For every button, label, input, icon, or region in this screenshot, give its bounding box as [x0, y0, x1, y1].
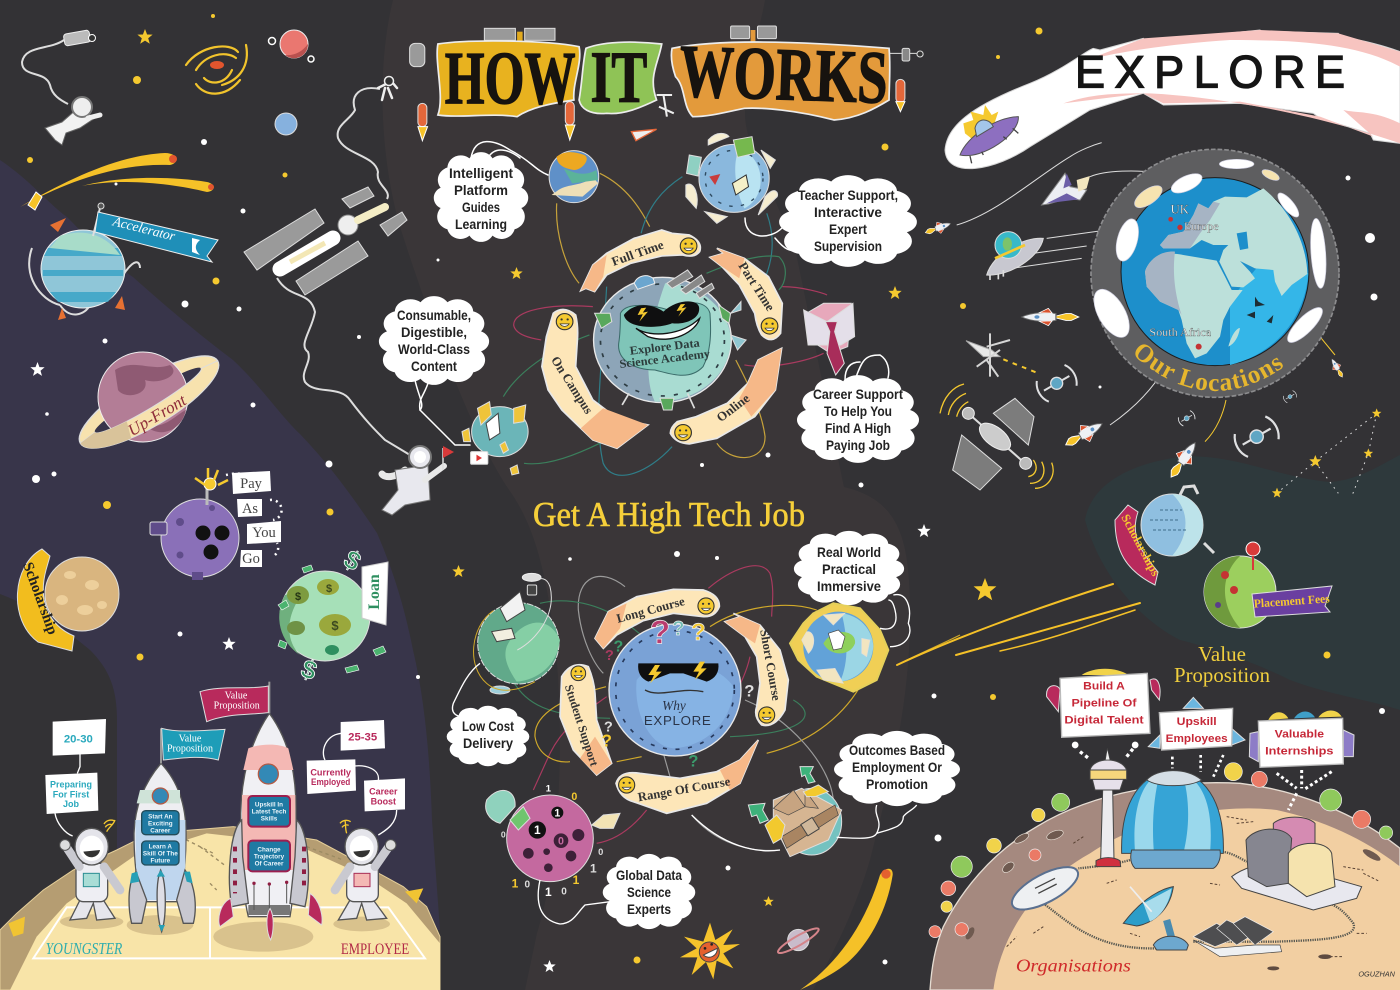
ribbon: Range Of Course — [616, 740, 758, 813]
cloud: Low Cost Delivery — [447, 706, 529, 766]
cloud: Low Cost Delivery: Delivery — [463, 735, 513, 751]
connectors and labels: age boxes: Currently — [310, 767, 351, 777]
flag: value proposition crimson: Value — [225, 690, 248, 701]
comet: Explore: EXPLORE — [1075, 47, 1345, 98]
heading: Value Proposition: Proposition — [1174, 663, 1270, 687]
cloud: Outcomes Based: Promotion — [866, 776, 928, 792]
Pay As You Go labels: Pay — [240, 476, 263, 492]
title: How It Works: IT — [590, 38, 647, 118]
rocket: employee: Latest Tech — [252, 809, 286, 816]
cloud: Teacher Support: Supervision — [814, 238, 882, 254]
planet: Loan: $ — [339, 544, 367, 577]
icon: small astronaut and satellite with tether — [22, 30, 100, 145]
Pay As You Go labels: As — [242, 501, 258, 517]
binary digits — [501, 784, 603, 899]
cloud: Low Cost Delivery: Low Cost — [462, 718, 514, 734]
title: satellites and rockets — [410, 26, 923, 141]
icon: constellation — [1272, 408, 1381, 498]
label: Organisations: Organisations — [1016, 956, 1131, 976]
rocket: youngster: Future — [150, 858, 171, 865]
ribbon: Short Course: Short Course — [757, 628, 784, 702]
rocket: employee: Change — [257, 846, 281, 853]
cloud: Outcomes Based: Outcomes Based — [849, 742, 945, 758]
icon: tie fighters — [1033, 363, 1298, 459]
title: How It Works: WORKS — [678, 30, 889, 120]
cloud: Outcomes Based: Employment Or — [852, 759, 942, 775]
cloud: Consumable Content: Consumable, — [397, 307, 471, 323]
heading: Value Proposition: Value — [1198, 642, 1246, 666]
signature: OGUZHAN — [1358, 970, 1396, 979]
binary digits: 1 — [512, 876, 519, 890]
rocket: youngster: Career — [150, 827, 171, 834]
ribbon: Part Time — [710, 248, 782, 340]
binary digits: 1 — [590, 862, 597, 876]
cloud: Intelligent Platform Guides Learning: Learning — [455, 216, 507, 232]
ribbon: On Campus: On Campus — [548, 354, 596, 416]
connectors and labels: age boxes: Job — [63, 799, 79, 809]
planet: low cost delivery — [452, 573, 560, 717]
flag: value proposition teal: Value — [179, 734, 202, 745]
icon: red planet — [268, 30, 314, 62]
question marks: ? — [672, 618, 684, 640]
planet: Loan: $ — [326, 583, 332, 595]
icon: shuttle — [1042, 173, 1090, 205]
connector lines: top clouds — [415, 142, 889, 445]
flag: value proposition teal: Proposition — [167, 744, 213, 755]
question marks: ? — [604, 720, 613, 736]
cloud: Teacher Support — [779, 175, 917, 267]
globe: our locations: South Africa — [1149, 325, 1212, 339]
binary digits: 1 — [546, 784, 551, 794]
rocket: youngster — [129, 763, 195, 932]
rocket: employee: Of Career — [255, 860, 284, 867]
planet: Scholarship: Scholarship — [19, 560, 60, 637]
planet: data experts — [486, 784, 620, 924]
cloud: Intelligent Platform Guides Learning: Platform — [454, 182, 508, 198]
icon: blue planet — [275, 113, 297, 135]
sign: Build A Pipeline: Build A — [1083, 680, 1125, 692]
icon: satellite with signals — [940, 384, 1053, 490]
orbits — [513, 566, 960, 850]
comets top left — [20, 153, 214, 207]
planet: Loan — [278, 544, 388, 686]
cloud: Real World Practical Immersive: Real World — [817, 544, 881, 560]
planet: Pay As You Go — [150, 468, 282, 580]
cloud: Global Data Science Experts: Science — [627, 884, 671, 900]
ribbon: Online — [670, 348, 782, 444]
central planet: Why Explore: EXPLORE — [644, 713, 711, 728]
cloud: Intelligent Platform Guides Learning — [434, 152, 528, 242]
cloud: Consumable Content: World-Class — [398, 341, 470, 357]
comet bottom — [800, 869, 893, 990]
heading: Value Proposition — [1174, 642, 1270, 687]
planet: Scholarships — [1115, 486, 1214, 585]
ribbon: On Campus — [542, 310, 648, 448]
ribbon: Online: Online — [714, 391, 753, 425]
sign: Build A Pipeline — [1047, 669, 1160, 759]
central planet: Explore Data Science Academy: Science Academy — [619, 347, 711, 371]
icon: flying saucer and sun — [960, 105, 1018, 163]
connectors and labels: age boxes: Preparing — [50, 779, 92, 789]
rocket: youngster: Exciting — [148, 820, 173, 827]
cloud: Career Support: Find A High — [825, 420, 891, 436]
cloud: Global Data Science Experts: Global Data — [616, 867, 682, 883]
planet: Placement Fees — [1204, 542, 1332, 628]
sign: Valuable Internships: Internships — [1265, 745, 1333, 757]
binary digits: 1 — [545, 885, 552, 899]
rocket: youngster: Learn A — [149, 844, 172, 851]
flag: value proposition crimson — [200, 682, 269, 722]
connectors and labels: age boxes — [45, 719, 405, 836]
question marks — [601, 614, 754, 771]
ribbon: Full Time — [581, 230, 700, 292]
ribbon: Long Course: Long Course — [615, 594, 687, 626]
diagram: Explore Data Science Academy — [462, 133, 855, 475]
connectors and labels: age boxes: For First — [53, 789, 89, 799]
section: Explore comet and locations — [924, 30, 1400, 538]
globe: our locations: Our Locations — [1135, 344, 1283, 392]
tethers — [957, 143, 1335, 442]
planet: Loan: Loan — [366, 574, 383, 610]
globe clouds — [1087, 159, 1328, 347]
ribbon: Range Of Course: Range Of Course — [637, 774, 732, 804]
globe: our locations: UK — [1171, 202, 1190, 216]
flag: value proposition crimson: Proposition — [214, 700, 260, 711]
sign: Build A Pipeline: Digital Talent — [1064, 715, 1144, 727]
sign: Valuable Internships — [1249, 710, 1354, 810]
cloud: Intelligent Platform Guides Learning: Intelligent — [449, 165, 513, 181]
cloud: Real World Practical Immersive: Practical — [822, 561, 876, 577]
planet: Loan: $ — [331, 618, 339, 633]
cloud: Teacher Support: Expert — [829, 221, 867, 237]
icon: smiling sun — [680, 923, 740, 979]
cloud: Consumable Content — [379, 296, 489, 385]
sign: Upskill Employees: Employees — [1166, 733, 1228, 745]
ribbon: Full Time: Full Time — [610, 238, 666, 269]
title: How It Works: HOW — [445, 37, 576, 120]
question marks: ? — [613, 639, 623, 656]
connectors and labels: age boxes: 20-30 — [64, 734, 93, 746]
ribbon: Short Course — [725, 613, 788, 726]
section: Youngster and Employee moon — [0, 682, 440, 990]
icon: small ringed planet — [776, 925, 821, 956]
icon: galaxy — [186, 45, 247, 94]
planet: Up-Front: Up-Front — [124, 390, 191, 440]
connectors and labels: age boxes: Career — [369, 786, 398, 796]
long comet trails centre right — [897, 584, 1140, 665]
icon: drone — [966, 333, 1040, 377]
cables — [1043, 852, 1354, 948]
binary digits: 0 — [571, 791, 577, 803]
ribbon: Long Course — [595, 589, 719, 648]
label: Employee: EMPLOYEE — [341, 941, 409, 958]
connectors and labels: age boxes: Employed — [311, 777, 350, 787]
planet: Loan: $ — [295, 591, 301, 603]
binary digits: 0 — [598, 847, 603, 857]
flag: value proposition teal — [161, 728, 225, 763]
planet: intelligent platform — [549, 151, 599, 203]
globe: our locations — [1090, 148, 1340, 398]
question marks: ? — [601, 731, 612, 751]
cloud: Career Support: To Help You — [824, 403, 892, 419]
Pay As You Go labels: Go — [242, 551, 260, 567]
cloud: Global Data Science Experts: Experts — [627, 901, 671, 917]
rocket: youngster: Skill Of The — [143, 851, 178, 858]
shrubs — [929, 763, 1393, 938]
connectors and labels: age boxes: Boost — [371, 796, 396, 806]
cloud: Outcomes Based — [834, 731, 960, 806]
planet: Placement Fees: Placement Fees — [1253, 591, 1330, 611]
binary digits: 0 — [561, 886, 567, 897]
binary digits: 0 — [501, 829, 506, 839]
planet: teacher support — [686, 133, 778, 223]
question marks: ? — [650, 614, 670, 651]
background: purple nebula — [0, 160, 440, 930]
orbits — [503, 173, 827, 475]
planet: content — [462, 402, 528, 475]
cloud: Global Data Science Experts — [603, 854, 695, 929]
rocket: employee: Upskill In — [255, 802, 283, 809]
comet: Explore — [945, 30, 1400, 169]
astronaut: youngster — [60, 820, 120, 920]
cloud: Real World Practical Immersive: Immersive — [817, 578, 881, 594]
cloud: Teacher Support: Interactive — [814, 204, 882, 220]
cloud: Intelligent Platform Guides Learning: Guides — [462, 199, 500, 215]
dome — [1122, 771, 1223, 868]
planet: outcomes shirt — [692, 767, 917, 857]
planet: Loan: $ — [297, 653, 322, 686]
sign: Valuable Internships: Valuable — [1275, 728, 1324, 740]
icon: space station and tethered astronauts — [244, 76, 410, 455]
ribbon: Student Support: Student Support — [562, 683, 601, 768]
Pay As You Go labels: You — [252, 525, 276, 541]
planet: data experts: 1 — [534, 823, 541, 837]
planet: immersive earth — [790, 595, 910, 692]
cloud: Consumable Content: Content — [411, 358, 457, 374]
moon surface — [930, 783, 1400, 990]
binary digits: 0 — [525, 879, 531, 890]
sign: Upskill Employees — [1148, 697, 1245, 777]
ribbon: Part Time: Part Time — [735, 260, 778, 314]
question marks: ? — [688, 752, 698, 771]
planet: data experts: 1 — [554, 808, 560, 820]
globe: our locations: Europe — [1184, 219, 1219, 233]
landing disc — [1006, 859, 1084, 918]
rocket: employee — [219, 713, 322, 940]
sign: Build A Pipeline: Pipeline Of — [1071, 698, 1137, 710]
cloud: Career Support — [797, 375, 919, 463]
planet: Scholarships: Scholarships — [1118, 512, 1163, 579]
cloud: Teacher Support: Teacher Support, — [798, 187, 898, 203]
question marks: ? — [744, 682, 754, 701]
planet: Scholarship — [17, 549, 119, 651]
rocket: employee: Trajectory — [254, 853, 285, 860]
planet: Accelerator: Accelerator — [110, 213, 178, 244]
cloud: Consumable Content: Digestible, — [401, 324, 467, 340]
planet: data experts: 0 — [558, 836, 564, 848]
background: centre band — [383, 0, 910, 990]
central planet: Why Explore — [601, 614, 754, 771]
section: Organisations moon — [929, 669, 1400, 990]
rocket: youngster: Start An — [148, 813, 173, 820]
question marks: ? — [691, 619, 706, 646]
heading: Get A High Tech Job: Get A High Tech Job — [533, 495, 805, 534]
central planet: Explore Data Science Academy — [594, 270, 746, 410]
Pay As You Go labels — [232, 471, 281, 567]
label: Youngster: YOUNGSTER — [46, 939, 122, 958]
icon: green alien saucer — [987, 232, 1043, 280]
title: How It Works — [410, 26, 923, 141]
control tower — [1090, 748, 1127, 867]
cloud: Real World Practical Immersive — [794, 531, 904, 605]
icon: astronaut with flag — [382, 446, 454, 515]
central planet: Why Explore: Why — [662, 698, 686, 713]
icon: rockets — [923, 218, 1346, 482]
planet: Up-Front — [68, 340, 230, 465]
rocket: employee: Skills — [261, 816, 278, 823]
planet: Accelerator — [28, 192, 218, 320]
solar panels — [1193, 917, 1282, 957]
question marks: ? — [605, 648, 614, 664]
ribbon: Student Support — [560, 665, 612, 775]
astronaut: employee — [335, 820, 396, 920]
central planet: Explore Data Science Academy: Explore Data — [629, 336, 700, 358]
connectors and labels: age boxes: 25-35 — [348, 732, 377, 744]
cloud: Career Support: Career Support — [813, 386, 903, 402]
binary digits: 1 — [573, 873, 580, 887]
diagram: Why Explore — [452, 566, 960, 990]
storage tanks — [1232, 817, 1362, 910]
satellite dish — [1123, 887, 1188, 950]
moon surface — [0, 827, 440, 990]
background: teal nebula — [1085, 455, 1400, 710]
cloud: Career Support: Paying Job — [826, 437, 890, 453]
icon: career support shirt and tie — [804, 303, 855, 375]
sign: Upskill Employees: Upskill — [1177, 716, 1217, 728]
